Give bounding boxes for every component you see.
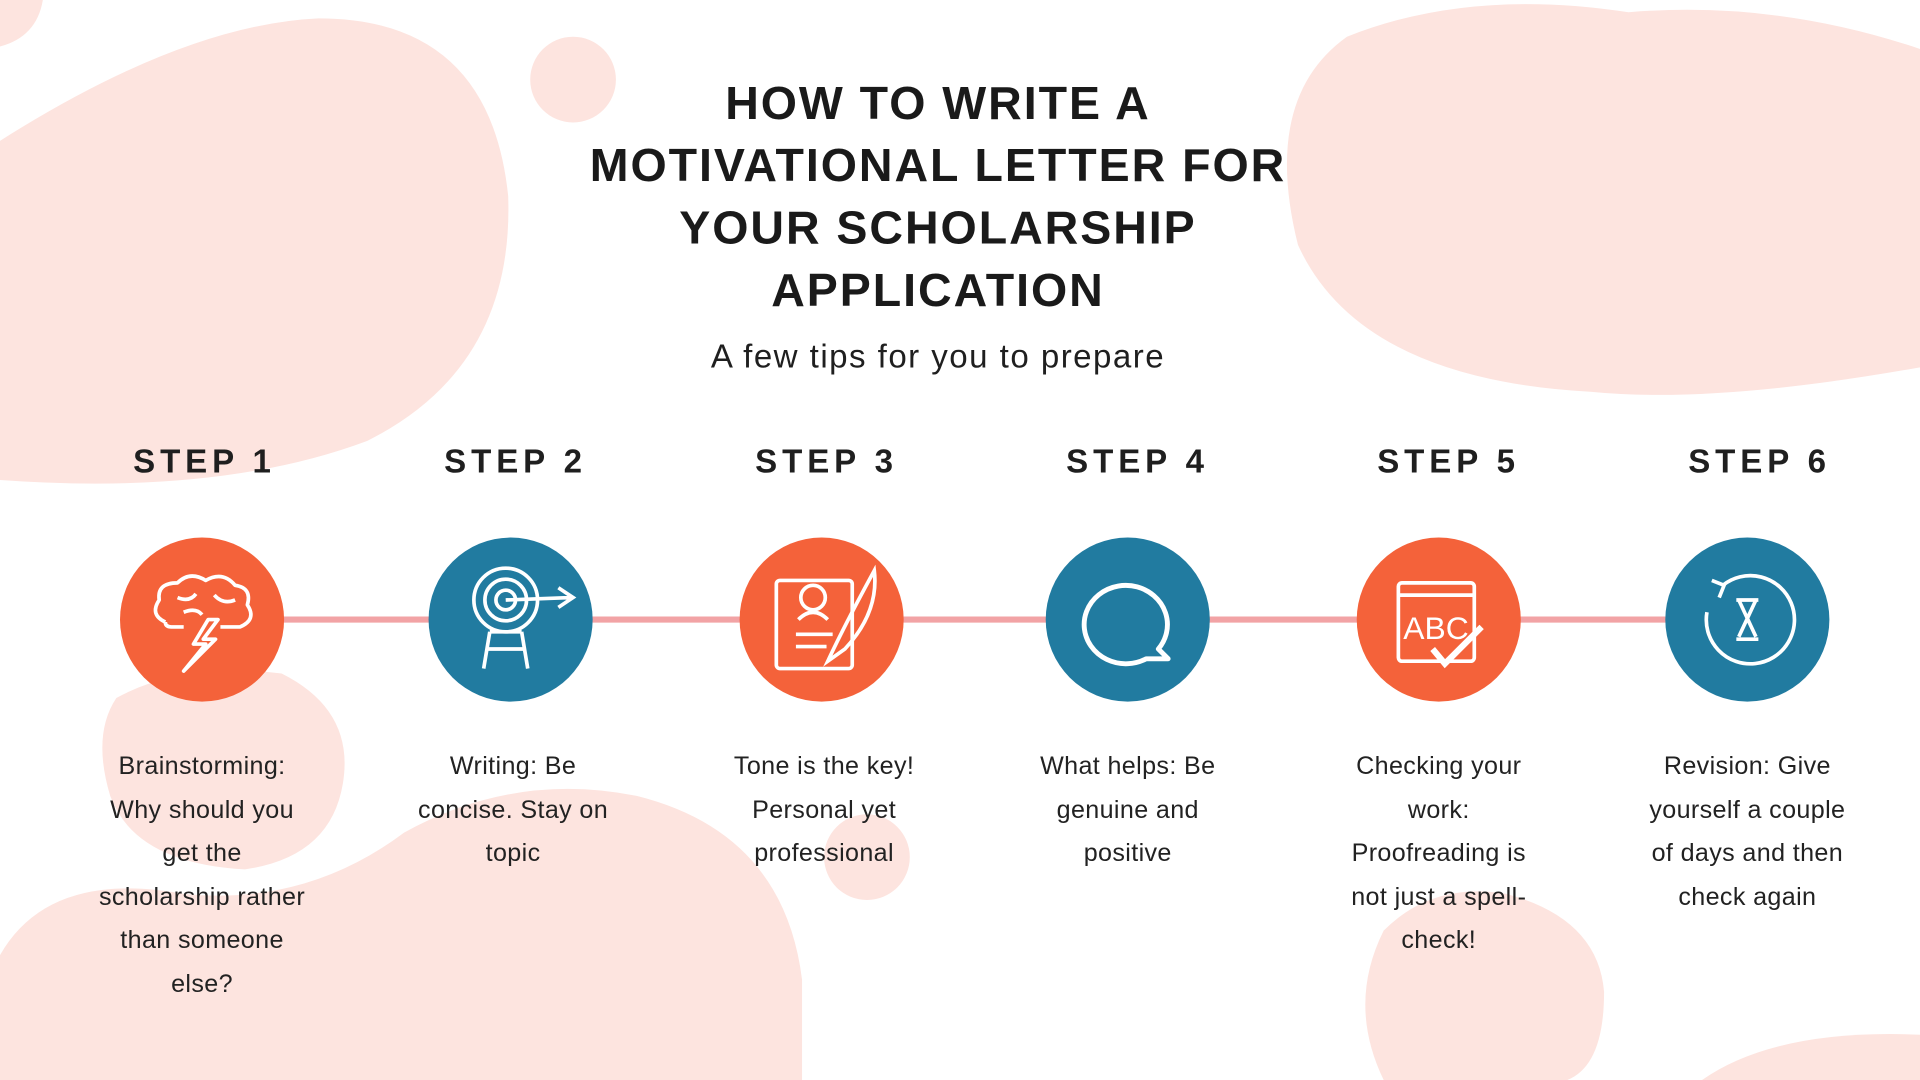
- step descriptions: topic: [486, 839, 540, 867]
- step descriptions: Personal yet: [752, 795, 896, 823]
- step descriptions: check again: [1678, 882, 1816, 910]
- subtitle: A few tips for you to prepare: [711, 338, 1165, 375]
- icon: speech bubble: [1046, 538, 1210, 702]
- step labels: STEP 3: [755, 443, 898, 480]
- step labels: STEP 5: [1377, 443, 1520, 480]
- step descriptions: else?: [171, 969, 233, 997]
- step descriptions: concise. Stay on: [418, 795, 608, 823]
- step descriptions: Proofreading is: [1352, 839, 1526, 867]
- step descriptions: positive: [1084, 839, 1172, 867]
- step descriptions: Revision: Give: [1664, 752, 1831, 780]
- step descriptions: genuine and: [1057, 795, 1199, 823]
- timeline with icons: [120, 538, 1830, 702]
- step descriptions: Why should you: [110, 795, 294, 823]
- step labels: STEP 1: [133, 443, 276, 480]
- icon: brain: [120, 538, 284, 702]
- step descriptions: Checking your: [1356, 752, 1521, 780]
- title: APPLICATION: [771, 266, 1105, 317]
- step labels: STEP 6: [1688, 443, 1831, 480]
- step descriptions: What helps: Be: [1040, 752, 1215, 780]
- step descriptions: than someone: [120, 926, 284, 954]
- step descriptions: of days and then: [1652, 839, 1843, 867]
- step labels: [133, 443, 1831, 480]
- icon: ABC check: ABC: [1403, 610, 1469, 646]
- icon: hourglass refresh: [1665, 538, 1829, 702]
- step descriptions: yourself a couple: [1649, 795, 1845, 823]
- step descriptions: Tone is the key!: [734, 752, 914, 780]
- step labels: STEP 2: [444, 443, 587, 480]
- step descriptions: check!: [1401, 926, 1476, 954]
- step descriptions: [99, 752, 1845, 997]
- icon: target: [429, 538, 593, 702]
- step descriptions: professional: [754, 839, 894, 867]
- step descriptions: Brainstorming:: [119, 752, 286, 780]
- step descriptions: not just a spell-: [1351, 882, 1526, 910]
- title: HOW TO WRITE A: [725, 78, 1151, 130]
- step labels: STEP 4: [1066, 443, 1209, 480]
- step descriptions: scholarship rather: [99, 882, 305, 910]
- icon: letter with quill: [740, 538, 904, 702]
- title: [590, 78, 1286, 317]
- step descriptions: get the: [162, 839, 242, 867]
- title: MOTIVATIONAL LETTER FOR: [590, 141, 1286, 192]
- step descriptions: Writing: Be: [450, 752, 576, 780]
- icon: ABC check: [1357, 538, 1521, 702]
- title: YOUR SCHOLARSHIP: [679, 203, 1197, 255]
- step descriptions: work:: [1408, 795, 1470, 823]
